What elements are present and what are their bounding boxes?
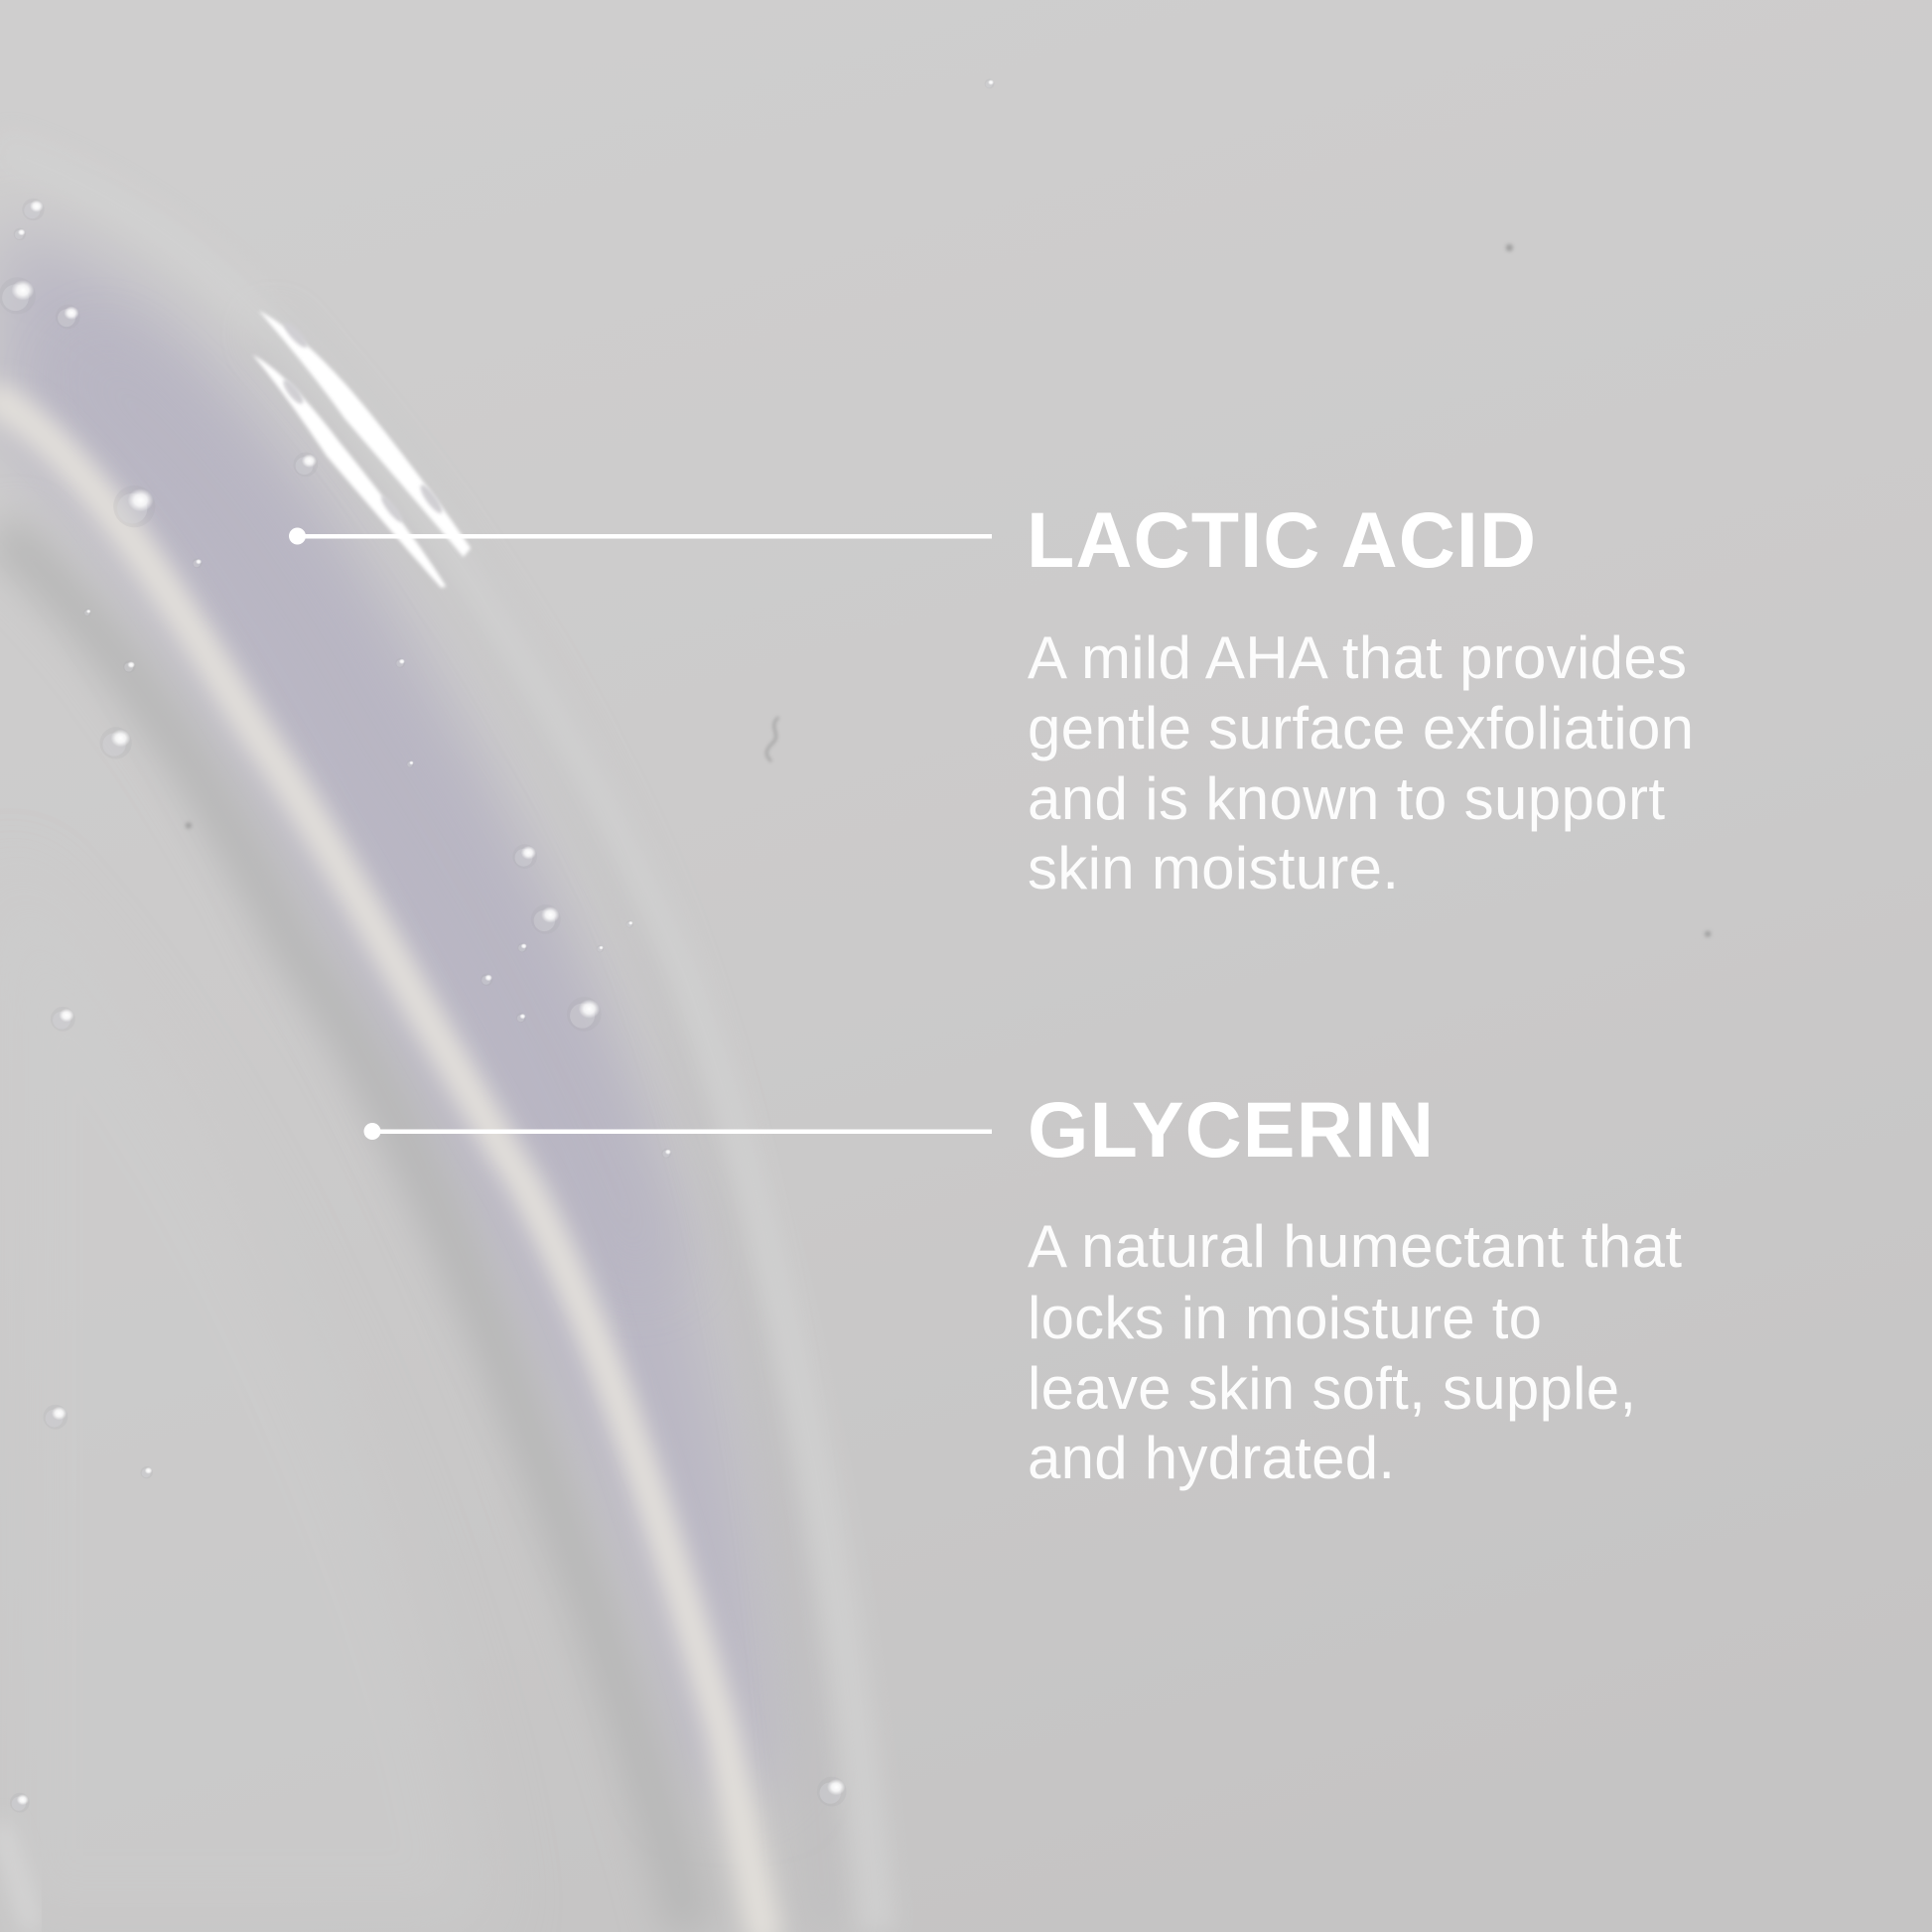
needle gaps <box>280 320 446 524</box>
body text: lactic acid <box>1028 624 1694 901</box>
body text: lactic acid: A mild AHA that provides <box>1028 624 1687 691</box>
leader line: lactic acid <box>289 528 992 544</box>
highlight needle: inner <box>252 354 446 588</box>
body text: glycerin: locks in moisture to <box>1028 1285 1542 1351</box>
gel outer shadow edge <box>265 323 826 1932</box>
highlight needle: outer <box>259 311 471 557</box>
body text: lactic acid: gentle surface exfoliation <box>1028 695 1694 761</box>
body text: lactic acid: skin moisture. <box>1028 835 1399 901</box>
heading: lactic acid: LACTIC ACID <box>1027 495 1536 584</box>
leader line: glycerin <box>363 1123 992 1140</box>
callout: lactic acid <box>289 495 1694 901</box>
body text: glycerin: and hydrated. <box>1028 1425 1395 1491</box>
body text: glycerin: leave skin soft, supple, <box>1028 1355 1636 1422</box>
heading: glycerin: GLYCERIN <box>1028 1085 1434 1173</box>
bubbles <box>0 78 995 1813</box>
callout: glycerin <box>363 1085 1682 1491</box>
lower left stroke <box>0 1824 32 1932</box>
inner ridge shadow <box>0 530 690 1932</box>
body text: lactic acid: and is known to support <box>1028 765 1665 832</box>
light wash below the ridge <box>0 863 492 1932</box>
specks <box>186 244 1711 937</box>
gel body core <box>73 357 653 1282</box>
body text: glycerin <box>1028 1213 1682 1491</box>
gel body tint <box>0 228 776 1787</box>
ridge highlight <box>0 400 763 1932</box>
gel outer rim <box>0 150 878 1932</box>
body text: glycerin: A natural humectant that <box>1028 1213 1682 1280</box>
